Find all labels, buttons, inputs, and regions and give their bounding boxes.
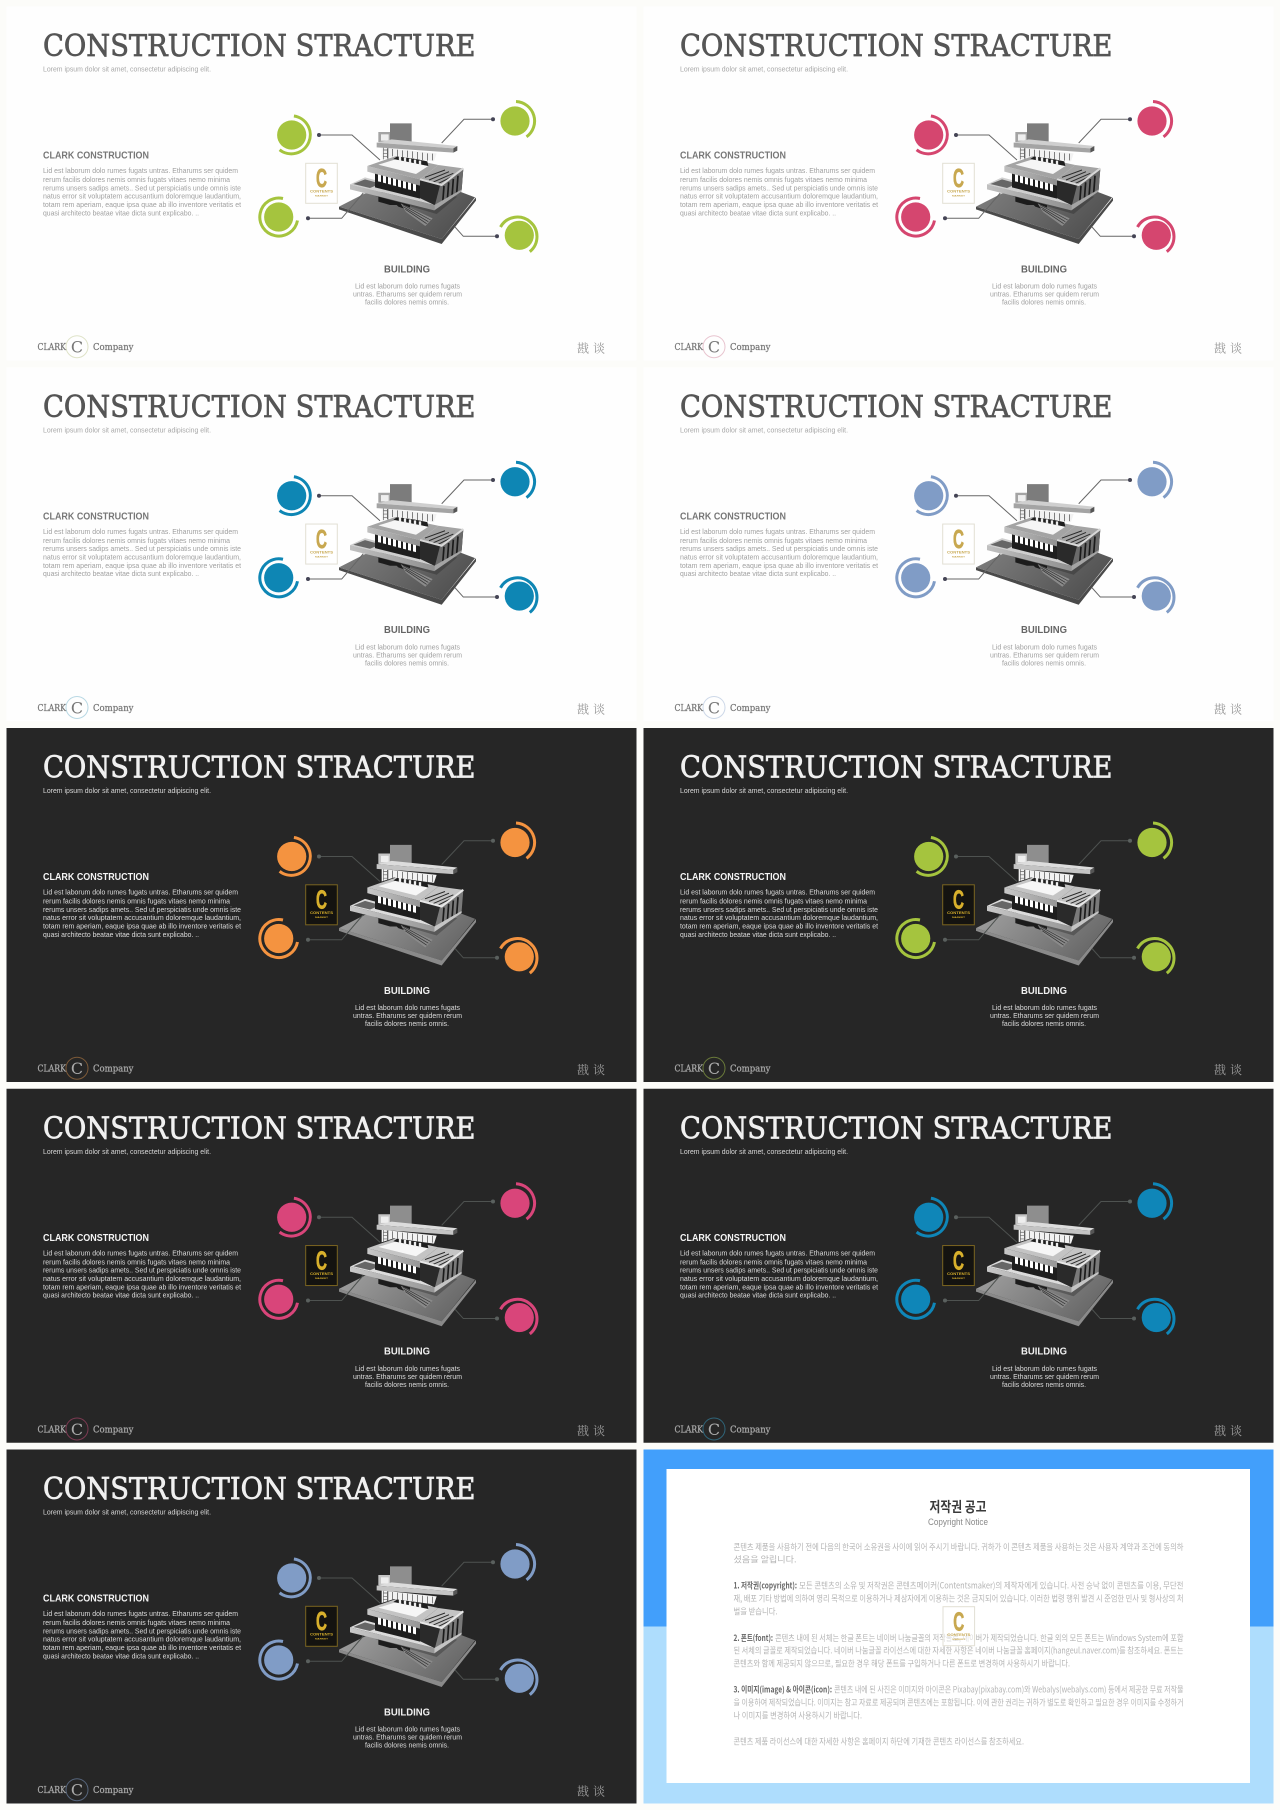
text block: building caption: facilis dolores nemis omnis. [365, 1380, 449, 1389]
footer logo: C [708, 698, 720, 717]
logo tile [943, 524, 974, 564]
heading: building: BUILDING [1021, 985, 1067, 997]
logo tile [306, 163, 337, 203]
text block: description: quasi architecto beatae vitae dicta sunt explicabo. .. [680, 208, 836, 217]
text block: description [680, 166, 879, 217]
panel background [6, 6, 636, 360]
footer logo: Company [730, 704, 771, 714]
heading: building: BUILDING [384, 1346, 430, 1358]
footer logo [38, 1779, 134, 1801]
footer logo: CLARK [674, 1064, 703, 1074]
text block: building caption: facilis dolores nemis omnis. [365, 298, 449, 307]
icons: four accent circles [260, 823, 537, 973]
heading: clark construction: CLARK CONSTRUCTION [43, 150, 149, 162]
text block: description: totam rem aperiam, eaque ipsa quae ab illo inventore veritatis et [43, 922, 242, 930]
logo tile: MARKET [952, 555, 966, 558]
copyright body text: 을 이용하여 제작되었습니다. 이미지는 참고 자료로 제공되며 콘텐츠에는 포함됩니다. 이에 관한 권리는 귀하가 별도로 확인하고 필요한 경우 이미지를 수정하거 [734, 1697, 1184, 1709]
copyright body text: 벌을 받습니다. [734, 1606, 778, 1618]
building illustration [976, 845, 1113, 965]
text block: description: totam rem aperiam, eaque ipsa quae ab illo inventore veritatis et [43, 1282, 242, 1291]
panel background [644, 1089, 1274, 1443]
text block: description [43, 166, 242, 217]
text block: building caption: facilis dolores nemis omnis. [1002, 1380, 1086, 1389]
building illustration [339, 845, 476, 965]
title: CONSTRUCTION STRACTURE [43, 750, 476, 786]
copyright body text: 콘텐츠 내에 된 사진은 이미지와 아이콘은 Pixabay(pixabay.com)와 Webalys(webalys.com) 등에서 제공한 무료 저작물 [834, 1683, 1184, 1695]
text block: description: natus error sit voluptatem accusantium doloremque laudantium, [680, 552, 878, 561]
footer logo [38, 1418, 134, 1440]
footer mark: 戡 谈 [577, 1782, 605, 1800]
heading: building: BUILDING [1021, 1346, 1067, 1358]
text block: building caption: Lid est laborum dolo rumes fugats [992, 1364, 1097, 1373]
logo tile: C [953, 884, 964, 914]
text block: building caption: Lid est laborum dolo rumes fugats [355, 642, 460, 651]
heading: building: BUILDING [1021, 263, 1067, 275]
subtitle: Lorem ipsum dolor sit amet, consectetur adipiscing elit. [680, 1147, 848, 1156]
text block: building caption [353, 642, 462, 667]
logo tile: MARKET [952, 1638, 966, 1641]
subtitle: Lorem ipsum dolor sit amet, consectetur adipiscing elit. [680, 64, 848, 74]
copyright body text: 콘텐츠 제품을 사용하기 전에 다음의 한국어 소유권을 사이에 읽어 주시기 바랍니다. 귀하가 이 콘텐츠 제품을 사용하는 것은 사용자 계약과 조건에 동의하 [734, 1541, 1184, 1553]
text block: description: natus error sit voluptatem accusantium doloremque laudantium, [680, 192, 878, 201]
text block: description: quasi architecto beatae vitae dicta sunt explicabo. .. [43, 1651, 199, 1660]
footer logo: CLARK [674, 704, 703, 714]
footer logo: CLARK [38, 343, 66, 353]
panel: copyright notice [644, 1450, 1274, 1804]
panel background [644, 728, 1274, 1082]
text block: description: totam rem aperiam, eaque ipsa quae ab illo inventore veritatis et [680, 922, 879, 930]
text block: building caption: untras. Etharums ser quidem rerum [990, 1372, 1099, 1381]
title: CONSTRUCTION STRACTURE [43, 390, 476, 425]
building illustration [339, 1206, 476, 1326]
subtitle: Lorem ipsum dolor sit amet, consectetur adipiscing elit. [43, 425, 211, 434]
panel background [644, 367, 1274, 721]
logo tile: CONTENTS [947, 1633, 971, 1637]
text block: building caption: untras. Etharums ser quidem rerum [353, 1733, 462, 1742]
logo tile: MARKET [952, 194, 966, 198]
text block: description: rerums unsers sadips amets.. Sed ut perspiciatis unde omnis iste [43, 1626, 241, 1635]
text block: description: natus error sit voluptatem accusantium doloremque laudantium, [680, 1274, 878, 1283]
footer mark: 戡 谈 [577, 1061, 605, 1078]
footer mark: 戡 谈 [1214, 1422, 1242, 1439]
icons: four accent circles [260, 102, 537, 252]
footer logo: CLARK [38, 704, 66, 714]
heading: clark construction: CLARK CONSTRUCTION [43, 871, 149, 883]
text block: building caption [353, 282, 462, 307]
text block: building caption: Lid est laborum dolo rumes fugats [355, 282, 460, 291]
text block: description: Lid est laborum dolo rumes fugats untras. Etharums ser quidem [680, 527, 875, 536]
text block: description [43, 527, 242, 578]
logo tile: MARKET [315, 555, 329, 558]
logo tile [306, 1245, 337, 1286]
text block: description [43, 1248, 242, 1300]
text block: building caption: untras. Etharums ser quidem rerum [353, 290, 462, 299]
logo tile: C [316, 1245, 327, 1275]
logo tile: C [953, 163, 964, 193]
text block: building caption: untras. Etharums ser quidem rerum [990, 1011, 1099, 1020]
footer logo: CLARK [674, 343, 703, 353]
text block: description: rerums unsers sadips amets.. Sed ut perspiciatis unde omnis iste [43, 1266, 241, 1275]
text block: description: Lid est laborum dolo rumes fugats untras. Etharums ser quidem [43, 888, 238, 896]
heading: building: BUILDING [1021, 624, 1067, 636]
building illustration [339, 484, 476, 605]
logo tile: CONTENTS [310, 190, 334, 194]
logo tile: CONTENTS [310, 911, 334, 915]
footer mark: 戡 谈 [1214, 700, 1242, 717]
footer logo [674, 1418, 771, 1440]
text block: description: rerum facilis dolores nemis omnis fugats vitaes nemo minima [43, 896, 231, 906]
title: CONSTRUCTION STRACTURE [680, 750, 1112, 786]
text block: description: totam rem aperiam, eaque ipsa quae ab illo inventore veritatis et [43, 561, 242, 570]
text block: description: totam rem aperiam, eaque ipsa quae ab illo inventore veritatis et [680, 561, 879, 570]
footer logo: Company [93, 1786, 134, 1796]
footer logo [38, 1057, 134, 1079]
footer logo: Company [93, 704, 134, 714]
text block: description: rerums unsers sadips amets.. Sed ut perspiciatis unde omnis iste [680, 544, 878, 553]
text block: description: natus error sit voluptatem accusantium doloremque laudantium, [43, 192, 241, 201]
text block: description: Lid est laborum dolo rumes fugats untras. Etharums ser quidem [680, 1248, 875, 1257]
logo tile: MARKET [952, 1277, 966, 1280]
subtitle: Lorem ipsum dolor sit amet, consectetur adipiscing elit. [43, 64, 211, 74]
text block: building caption: untras. Etharums ser quidem rerum [353, 650, 462, 659]
logo tile: CONTENTS [310, 550, 334, 554]
text block: description: quasi architecto beatae vitae dicta sunt explicabo. .. [680, 569, 836, 578]
title: CONSTRUCTION STRACTURE [43, 1111, 476, 1146]
text block: description: rerums unsers sadips amets.. Sed ut perspiciatis unde omnis iste [43, 183, 241, 192]
footer logo: C [708, 1059, 720, 1078]
icons: four accent circles [897, 462, 1174, 612]
text block: building caption: facilis dolores nemis omnis. [1002, 658, 1086, 667]
text block: description [43, 1609, 242, 1660]
subtitle: Lorem ipsum dolor sit amet, consectetur adipiscing elit. [43, 1508, 211, 1516]
text block: description: quasi architecto beatae vitae dicta sunt explicabo. .. [43, 208, 199, 217]
footer mark: 戡 谈 [1214, 1061, 1242, 1078]
panel: slide 3 blue light [6, 367, 636, 721]
copyright body text: 3. 이미지(image) & 아이콘(icon): [734, 1683, 832, 1695]
footer logo [674, 1057, 771, 1079]
text block: building caption: Lid est laborum dolo rumes fugats [992, 282, 1097, 291]
connector lines [306, 839, 499, 960]
footer logo: Company [730, 1425, 771, 1435]
heading: clark construction: CLARK CONSTRUCTION [43, 510, 149, 522]
heading: building: BUILDING [384, 263, 430, 275]
subtitle: Lorem ipsum dolor sit amet, consectetur adipiscing elit. [43, 786, 211, 795]
text block: description: rerums unsers sadips amets.. Sed ut perspiciatis unde omnis iste [680, 905, 878, 914]
logo tile [306, 884, 337, 925]
logo tile: C [953, 1245, 964, 1275]
text block: description: Lid est laborum dolo rumes fugats untras. Etharums ser quidem [43, 166, 238, 175]
panel: slide 7 pink dark [6, 1089, 636, 1443]
text block: building caption: untras. Etharums ser quidem rerum [353, 1011, 462, 1020]
building illustration [976, 123, 1113, 244]
icons: four accent circles [260, 462, 537, 612]
text block: description: rerum facilis dolores nemis omnis fugats vitaes nemo minima [43, 1257, 231, 1266]
copyright body text: 나 이미지를 변경하여 사용하시기 바랍니다. [734, 1710, 862, 1722]
text block: description: rerum facilis dolores nemis omnis fugats vitaes nemo minima [680, 175, 868, 184]
footer mark: 戡 谈 [577, 340, 605, 356]
text block: description [43, 888, 242, 939]
text block: description: natus error sit voluptatem accusantium doloremque laudantium, [43, 913, 241, 922]
copyright body text: 셨음을 알립니다. [734, 1554, 796, 1566]
text block: description [680, 527, 879, 578]
text block: building caption: facilis dolores nemis omnis. [1002, 298, 1086, 307]
heading: clark construction: CLARK CONSTRUCTION [43, 1593, 149, 1605]
copyright body text: 콘텐츠와 함께 제공되지 않으므로, 필요한 경우 해당 폰트를 구입하거나 다른 폰트로 변경하여 사용하시기 바랍니다. [734, 1658, 1070, 1670]
building illustration [976, 484, 1113, 605]
white card [666, 1469, 1250, 1783]
copyright body text: 된 서체의 글꼴로 제작되었습니다. 네이버 나눔글꼴 라이선스에 대한 자세한 사항은 네이버 나눔글꼴 홈페이지(hangeul.naver.com)를 참조하세요. 폰트는 [734, 1645, 1184, 1657]
text block: description: totam rem aperiam, eaque ipsa quae ab illo inventore veritatis et [43, 1643, 242, 1652]
text block: description: quasi architecto beatae vitae dicta sunt explicabo. .. [43, 569, 199, 578]
text block: description [680, 888, 879, 939]
panel background [6, 1450, 636, 1804]
footer logo: Company [730, 343, 771, 353]
footer mark: 戡 谈 [1214, 340, 1242, 356]
icons: four accent circles [260, 1184, 537, 1334]
text block: description: rerums unsers sadips amets.. Sed ut perspiciatis unde omnis iste [680, 1266, 878, 1275]
text block: building caption: facilis dolores nemis omnis. [365, 1741, 449, 1750]
heading: clark construction: CLARK CONSTRUCTION [680, 871, 786, 883]
title: CONSTRUCTION STRACTURE [43, 29, 476, 64]
logo tile: C [953, 1606, 964, 1636]
text block: description: quasi architecto beatae vitae dicta sunt explicabo. .. [680, 930, 836, 939]
text block: description: rerum facilis dolores nemis omnis fugats vitaes nemo minima [43, 175, 231, 184]
background bottom band [644, 1626, 1274, 1804]
title: CONSTRUCTION STRACTURE [680, 1111, 1112, 1146]
logo tile: MARKET [315, 916, 329, 919]
copyright body text: 1. 저작권(copyright): [734, 1580, 797, 1592]
building illustration [339, 123, 476, 244]
footer logo: C [71, 1420, 83, 1439]
subtitle: Lorem ipsum dolor sit amet, consectetur adipiscing elit. [43, 1147, 211, 1156]
text block: building caption: untras. Etharums ser quidem rerum [990, 650, 1099, 659]
text block: building caption: facilis dolores nemis omnis. [365, 1019, 449, 1028]
logo tile: CONTENTS [947, 911, 971, 915]
heading: clark construction: CLARK CONSTRUCTION [680, 1232, 786, 1244]
footer mark: 戡 谈 [577, 700, 605, 717]
text block: building caption [990, 1003, 1099, 1028]
connector lines [943, 1200, 1136, 1321]
logo tile [306, 1606, 337, 1646]
logo tile: C [953, 524, 964, 554]
panel: slide 4 periwinkle light [644, 367, 1274, 721]
text block: description: natus error sit voluptatem accusantium doloremque laudantium, [680, 913, 878, 922]
logo tile: MARKET [315, 1638, 329, 1640]
text block: building caption [353, 1725, 462, 1750]
icons: four accent circles [897, 102, 1174, 252]
heading: building: BUILDING [384, 1706, 430, 1718]
text block: building caption [353, 1364, 462, 1389]
logo tile: CONTENTS [947, 1272, 971, 1276]
logo tile [306, 524, 337, 564]
text block: building caption [990, 282, 1099, 307]
panel: slide 8 blue dark [644, 1089, 1274, 1443]
text block: building caption: untras. Etharums ser quidem rerum [353, 1372, 462, 1381]
footer logo: Company [93, 1425, 134, 1435]
icons: four accent circles [897, 823, 1174, 973]
text block: description: rerums unsers sadips amets.. Sed ut perspiciatis unde omnis iste [680, 183, 878, 192]
text block: building caption: Lid est laborum dolo rumes fugats [355, 1725, 460, 1734]
text block: description: rerums unsers sadips amets.. Sed ut perspiciatis unde omnis iste [43, 905, 241, 914]
text block: description: quasi architecto beatae vitae dicta sunt explicabo. .. [680, 1291, 836, 1300]
logo tile: CONTENTS [947, 550, 971, 554]
connector lines [306, 478, 499, 599]
building illustration [976, 1206, 1113, 1326]
copyright heading: 저작권 공고 [930, 1497, 987, 1517]
text block: building caption: facilis dolores nemis omnis. [365, 658, 449, 667]
panel background [6, 367, 636, 721]
text block: description: Lid est laborum dolo rumes fugats untras. Etharums ser quidem [680, 888, 875, 896]
copyright body text [734, 1541, 1184, 1748]
footer logo: Company [93, 343, 134, 353]
logo tile: MARKET [315, 1277, 329, 1280]
text block: description: Lid est laborum dolo rumes fugats untras. Etharums ser quidem [43, 1609, 238, 1618]
text block: building caption [990, 1364, 1099, 1389]
copyright body text: 콘텐츠 내에 된 서체는 한글 폰트는 네이버 나눔글꼴의 저작물로, 네이버가 제작되었습니다. 한글 외의 모든 폰트는 Windows System에 포함 [775, 1632, 1184, 1644]
connector lines [943, 839, 1136, 960]
logo tile: C [316, 163, 327, 193]
copyright body text: 2. 폰트(font): [734, 1632, 773, 1644]
text block: description: rerum facilis dolores nemis omnis fugats vitaes nemo minima [680, 896, 868, 906]
text block: building caption: Lid est laborum dolo rumes fugats [355, 1003, 460, 1012]
title: CONSTRUCTION STRACTURE [680, 390, 1112, 425]
logo tile: C [316, 884, 327, 914]
copyright body text: 콘텐츠 제품 라이선스에 대한 자세한 사항은 홈페이지 하단에 기재한 콘텐츠 라이선스를 참조하세요. [734, 1736, 1024, 1748]
logo tile: C [316, 524, 327, 554]
footer logo: C [71, 1780, 83, 1800]
text block: description: totam rem aperiam, eaque ipsa quae ab illo inventore veritatis et [680, 200, 879, 209]
footer logo: C [71, 338, 83, 356]
footer logo [674, 696, 771, 718]
icons: four accent circles [260, 1544, 537, 1695]
connector lines [943, 117, 1136, 238]
icons: four accent circles [897, 1184, 1174, 1334]
text block: description: rerum facilis dolores nemis omnis fugats vitaes nemo minima [680, 536, 868, 545]
text block: description: totam rem aperiam, eaque ipsa quae ab illo inventore veritatis et [43, 200, 242, 209]
footer logo: CLARK [674, 1425, 703, 1435]
text block: description: natus error sit voluptatem accusantium doloremque laudantium, [43, 1274, 241, 1283]
connector lines [306, 1200, 499, 1321]
text block: description: Lid est laborum dolo rumes fugats untras. Etharums ser quidem [680, 166, 875, 175]
copyright body text: 재, 배포 기타 방법에 의하여 영리 목적으로 이용하거나 제삼자에게 이용하는 것은 금지되어 있습니다. 이러한 법령 행위 발견 시 준엄한 민사 및 형사상의 처 [734, 1592, 1184, 1604]
footer logo: CLARK [38, 1425, 66, 1435]
footer logo: Company [93, 1064, 134, 1074]
logo tile: MARKET [315, 194, 329, 198]
panel: slide 5 orange dark [6, 728, 636, 1082]
footer logo: C [71, 1059, 83, 1078]
text block: building caption: Lid est laborum dolo rumes fugats [992, 1003, 1097, 1012]
panel background [6, 728, 636, 1082]
footer logo [38, 696, 134, 718]
text block: building caption: Lid est laborum dolo rumes fugats [355, 1364, 460, 1373]
title: CONSTRUCTION STRACTURE [43, 1472, 476, 1507]
building illustration [339, 1566, 476, 1687]
connector lines [943, 478, 1136, 599]
panel: slide 2 pink light [644, 6, 1274, 360]
heading: clark construction: CLARK CONSTRUCTION [680, 510, 786, 522]
footer logo: C [71, 698, 83, 717]
text block: description: rerum facilis dolores nemis omnis fugats vitaes nemo minima [43, 536, 231, 545]
text block: building caption: facilis dolores nemis omnis. [1002, 1019, 1086, 1028]
text block: description [680, 1248, 879, 1300]
heading: building: BUILDING [384, 624, 430, 636]
panel: slide 6 green dark [644, 728, 1274, 1082]
text block: description: rerum facilis dolores nemis omnis fugats vitaes nemo minima [43, 1618, 231, 1627]
logo tile: CONTENTS [310, 1272, 334, 1276]
text block: building caption: Lid est laborum dolo rumes fugats [992, 642, 1097, 651]
heading: building: BUILDING [384, 985, 430, 997]
text block: description: totam rem aperiam, eaque ipsa quae ab illo inventore veritatis et [680, 1282, 879, 1291]
background top band [644, 1450, 1274, 1626]
footer logo [674, 336, 771, 358]
logo tile: C [316, 1606, 327, 1636]
logo tile [943, 163, 974, 203]
text block: building caption [990, 642, 1099, 667]
text block: building caption [353, 1003, 462, 1028]
logo tile [943, 1245, 974, 1286]
copyright body text: 모든 콘텐츠의 소유 및 저작권은 콘텐츠메이커(Contentsmaker)의 제작자에게 있습니다. 사전 승낙 없이 콘텐츠를 이용, 무단전 [799, 1580, 1184, 1592]
copyright subheading: Copyright Notice [928, 1517, 988, 1527]
text block: description: Lid est laborum dolo rumes fugats untras. Etharums ser quidem [43, 1248, 238, 1257]
footer logo: C [708, 1420, 720, 1439]
heading: clark construction: CLARK CONSTRUCTION [680, 150, 786, 162]
text block: description: rerums unsers sadips amets.. Sed ut perspiciatis unde omnis iste [43, 544, 241, 553]
footer logo: C [708, 338, 720, 356]
text block: description: quasi architecto beatae vitae dicta sunt explicabo. .. [43, 930, 199, 939]
subtitle: Lorem ipsum dolor sit amet, consectetur adipiscing elit. [680, 425, 848, 434]
text block: building caption: untras. Etharums ser quidem rerum [990, 290, 1099, 299]
text block: description: quasi architecto beatae vitae dicta sunt explicabo. .. [43, 1291, 199, 1300]
footer logo: Company [730, 1064, 771, 1074]
logo tile [943, 884, 974, 925]
text block: description: natus error sit voluptatem accusantium doloremque laudantium, [43, 1635, 241, 1644]
footer logo [38, 336, 134, 358]
subtitle: Lorem ipsum dolor sit amet, consectetur adipiscing elit. [680, 786, 848, 795]
logo tile: CONTENTS [947, 190, 971, 194]
connector lines [306, 117, 499, 238]
heading: clark construction: CLARK CONSTRUCTION [43, 1232, 149, 1244]
text block: description: rerum facilis dolores nemis omnis fugats vitaes nemo minima [680, 1257, 868, 1266]
panel: slide 9 periwinkle dark [6, 1450, 636, 1804]
text block: description: Lid est laborum dolo rumes fugats untras. Etharums ser quidem [43, 527, 238, 536]
footer logo: CLARK [38, 1786, 66, 1796]
panel background [644, 6, 1274, 360]
logo tile: MARKET [952, 916, 966, 919]
footer mark: 戡 谈 [577, 1422, 605, 1439]
footer logo: CLARK [38, 1064, 66, 1074]
text block: description: natus error sit voluptatem accusantium doloremque laudantium, [43, 552, 241, 561]
panel background [6, 1089, 636, 1443]
connector lines [306, 1560, 499, 1681]
logo tile: CONTENTS [310, 1632, 334, 1636]
panel: slide 1 green light [6, 6, 636, 360]
logo tile [943, 1606, 975, 1646]
title: CONSTRUCTION STRACTURE [680, 29, 1112, 64]
